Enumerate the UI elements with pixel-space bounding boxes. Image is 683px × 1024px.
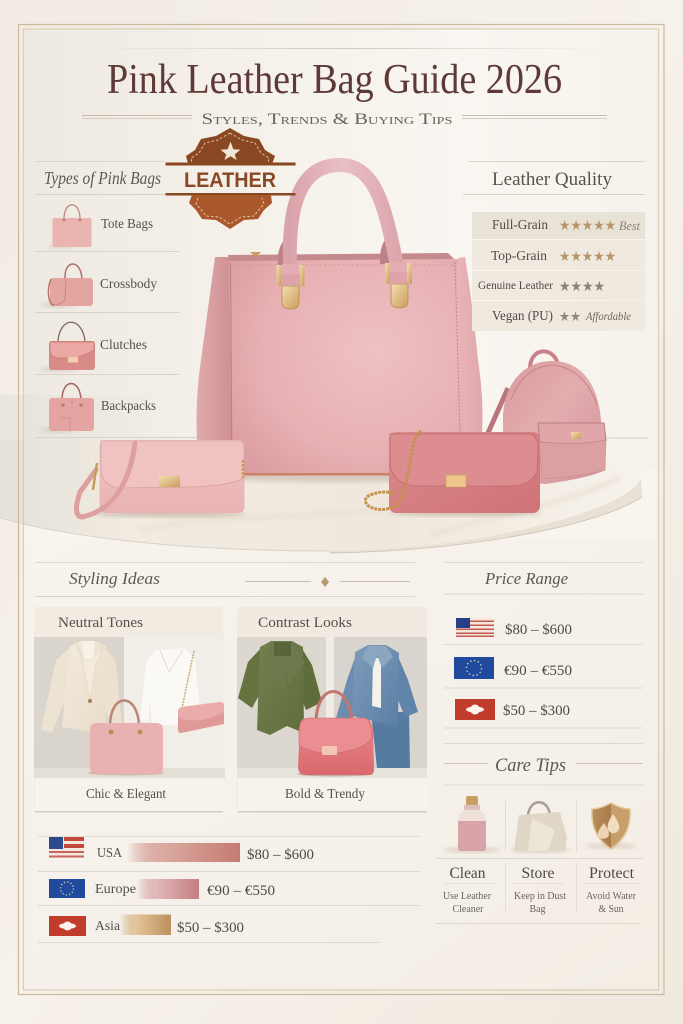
price row: europe: €90 – €550 [504,663,572,679]
row: usa [49,837,314,863]
bag handle [278,238,290,266]
cream blazer [41,641,122,735]
flag: usa [49,837,84,858]
styling card: contrast looks: Bold & Trendy [285,787,365,802]
styling card: contrast looks: Contrast Looks [258,615,352,631]
small deep pink clutch [365,431,541,516]
bag sides [196,257,232,440]
price row: asia [444,699,643,728]
type: crossbody: Crossbody [100,276,157,291]
styling card: neutral tones: Neutral Tones [58,615,143,631]
bag front panel [229,259,463,475]
price row: usa: $80 – $600 [505,622,572,638]
panel: leather quality [463,161,645,331]
neutral pink tote [88,772,164,776]
subtitle: Styles, Trends & Buying Tips [202,111,452,128]
care item: protect [586,865,636,915]
heading: price range: Price Range [484,569,568,588]
icon: dust bag [510,802,570,852]
styling card: contrast looks [237,607,427,812]
price row: asia: $50 – $300 [503,703,570,719]
care item: clean: Use Leather [443,891,491,902]
rating row: vegan: Vegan (PU) [492,309,553,324]
ornament [321,577,329,587]
styling card: neutral tones: Chic & Elegant [86,787,166,802]
row: europe [49,879,275,899]
main pink handbag [190,165,490,482]
price row: usa [444,618,643,645]
type: backpacks: Backpacks [101,398,156,413]
white blouse [140,648,201,726]
leather badge [166,128,296,229]
title: Pink Leather Bag Guide 2026 [107,57,562,103]
panel: types of pink bags [35,161,200,438]
rating row: full-grain: Full-Grain [492,218,548,233]
type: crossbody [35,264,180,313]
rating row: genuine leather [472,271,645,300]
row: asia: $50 – $300 [177,920,244,936]
row: europe: €90 – €550 [207,883,275,899]
care item: protect: Protect [589,865,635,882]
rating row: top-grain: ★★★★★ [559,249,616,265]
row: usa: $80 – $600 [247,847,314,863]
heading: leather quality: Leather Quality [492,169,612,190]
care item: store: Bag [530,904,546,915]
flag: europe [454,657,494,679]
row: asia: Asia [95,919,121,934]
small crossbody bag [178,651,224,733]
small light pink clutch [76,440,246,517]
backpack [488,351,606,484]
type: backpacks [35,384,200,438]
type: clutches: Clutches [100,337,147,352]
heading: styling ideas: Styling Ideas [69,569,160,588]
panel: care tips [436,743,643,924]
row: asia [49,914,244,936]
heading: types of pink bags [35,161,165,195]
rating row: genuine leather: ★★★★ [559,279,605,295]
wall background [24,30,658,470]
panel: price range [444,562,643,728]
care dividers [436,800,643,924]
flag: usa [456,618,494,637]
badge star [220,141,241,160]
care item: clean: Cleaner [452,904,484,915]
rating row: full-grain: Best [619,219,641,233]
bag hardware right [385,263,412,308]
clutch strap [76,443,135,517]
type: tote bags [35,205,179,252]
rating row: vegan [472,301,645,331]
price row: europe [444,657,643,688]
flag: europe [49,879,85,898]
rating row: genuine leather: Genuine Leather [478,278,553,292]
contrast photo [237,637,427,778]
heading: types of pink bags: Types of Pink Bags [44,168,161,188]
bag hardware left [276,265,304,309]
care item: protect: Avoid Water [586,891,636,902]
regional price bars [38,836,420,943]
flag: asia [49,916,86,936]
care item: store: Store [522,865,554,882]
row: usa: USA [97,846,123,861]
rating row: top-grain: Top-Grain [491,249,547,264]
platform [0,395,648,553]
care item: store: Keep in Dust [514,891,566,902]
rating row: top-grain [472,240,645,270]
care item: store [514,865,566,915]
icon: cleaner bottle [444,796,500,852]
clutch chain [365,431,421,510]
rating row: vegan: Affordable [585,311,631,323]
type: clutches [35,322,179,375]
care item: protect: & Sun [598,904,624,915]
zipper pull [250,252,261,257]
lower background [24,540,658,990]
care item: clean [443,865,491,915]
flag: asia [455,699,495,720]
olive jacket [238,641,322,735]
rating row: full-grain [472,212,645,239]
red handbag [297,773,373,776]
row: europe: Europe [95,882,136,897]
neutral photo [34,637,225,778]
heading: care tips: Care Tips [495,755,566,776]
rating row: vegan: ★★ [559,309,581,325]
care item: clean: Clean [450,865,486,882]
leather badge: LEATHER [184,169,276,192]
jeans [371,712,410,768]
bag lining [228,253,456,262]
heading: styling ideas [35,562,415,597]
styling card: neutral tones [34,607,225,812]
type: tote bags: Tote Bags [101,216,153,231]
denim jacket [336,645,418,727]
rating row: full-grain: ★★★★★ [559,218,616,234]
icon: protective shield [585,803,637,849]
